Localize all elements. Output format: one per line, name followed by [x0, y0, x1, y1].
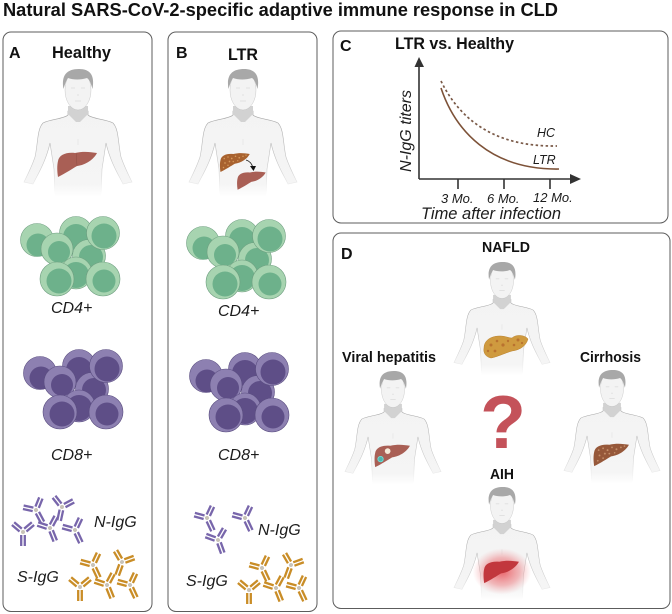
- x axis title: Time after infection: [421, 205, 561, 223]
- NAFLD heading: NAFLD: [482, 239, 530, 256]
- panel A heading: Healthy: [52, 44, 112, 62]
- AIH heading: AIH: [490, 466, 514, 483]
- cirrhosis person with scarred liver: [564, 370, 660, 484]
- panel D letter: D: [341, 246, 353, 263]
- CD8+ T cell cluster: [190, 352, 289, 432]
- panel C letter: C: [340, 38, 352, 55]
- diseased liver: [220, 153, 250, 172]
- inflammation glow: [473, 548, 531, 595]
- S-IgG antibodies: [238, 552, 315, 605]
- panel D frame: [333, 233, 670, 608]
- LTR person with diseased and transplanted liver: [189, 69, 297, 197]
- tick label 6 months: 6 Mo.: [487, 191, 520, 206]
- healthy graft liver: [237, 172, 266, 190]
- CD8+ label: CD8+: [51, 447, 92, 464]
- HC dashed curve: [441, 81, 557, 146]
- CD4+ label: CD4+: [218, 303, 259, 320]
- question mark: ?: [480, 380, 526, 464]
- panel B: LTR: [168, 32, 317, 612]
- panel B frame: [168, 32, 317, 612]
- CD8+ label: CD8+: [218, 447, 259, 464]
- N-IgG label: N-IgG: [94, 514, 137, 531]
- panel A letter: A: [9, 45, 21, 62]
- fat spots: [487, 338, 523, 352]
- panel C heading: LTR vs. Healthy: [395, 34, 515, 53]
- tick label 3 months: 3 Mo.: [441, 191, 474, 206]
- S-IgG antibodies: [69, 549, 146, 602]
- panel D: chronic liver diseases: [333, 233, 670, 608]
- fatty liver: [484, 335, 528, 358]
- N-IgG label: N-IgG: [258, 522, 301, 539]
- viral hepatitis person: [345, 371, 441, 485]
- CD4+ label: CD4+: [51, 300, 92, 317]
- panel A frame: [3, 32, 152, 612]
- S-IgG label: S-IgG: [186, 573, 228, 590]
- LTR curve label: LTR: [533, 153, 556, 167]
- Cirrhosis heading: Cirrhosis: [580, 349, 641, 366]
- HC label: HC: [537, 126, 556, 140]
- Viral hepatitis heading: Viral hepatitis: [342, 349, 436, 366]
- panel C frame: [333, 31, 668, 223]
- y axis title: N-IgG titers: [398, 90, 415, 172]
- LTR solid curve: [441, 88, 559, 169]
- liver lesion: [385, 448, 391, 454]
- CD8+ T cell cluster: [24, 350, 123, 429]
- panel B letter: B: [176, 45, 188, 62]
- virus particle: [378, 456, 383, 462]
- line chart axes: [414, 57, 581, 189]
- healthy person with liver: [24, 69, 132, 197]
- CD4+ T cell cluster: [186, 220, 286, 299]
- S-IgG label: S-IgG: [17, 569, 59, 586]
- tick label 12 months: 12 Mo.: [533, 190, 573, 205]
- panel B heading: LTR: [228, 46, 258, 64]
- panel C: LTR vs. Healthy chart: [333, 31, 668, 223]
- panel A: healthy: [3, 32, 152, 612]
- NAFLD person with fatty liver: [454, 262, 550, 376]
- AIH person with inflamed liver: [454, 487, 550, 601]
- N-IgG antibodies: [193, 504, 261, 557]
- N-IgG antibodies: [12, 495, 91, 547]
- CD4+ T cell cluster: [20, 216, 120, 296]
- transplant arrow: [246, 160, 253, 168]
